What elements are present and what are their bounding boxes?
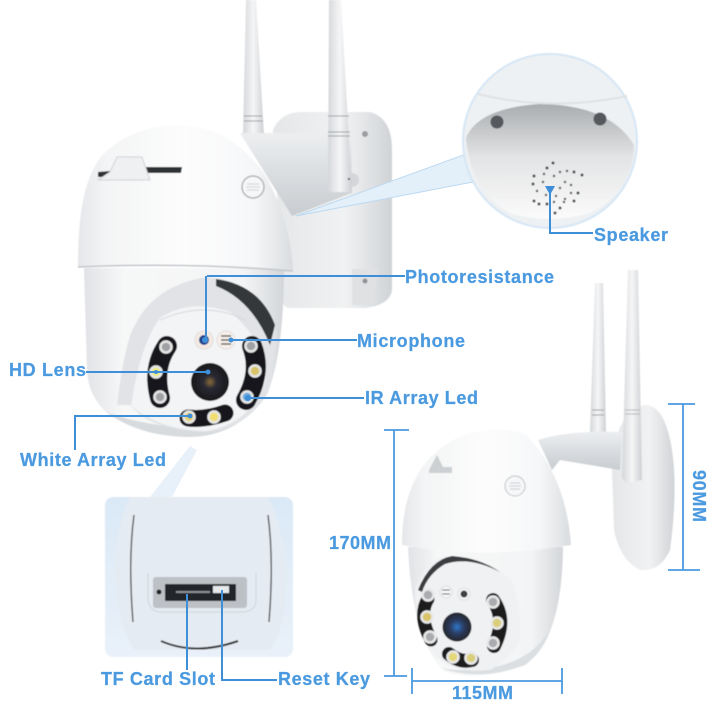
small camera lower body: [408, 547, 563, 676]
panel: speaker close-up: [463, 54, 637, 228]
icon: main lens: [191, 363, 229, 401]
camera dome: [78, 125, 293, 271]
label: 90MM: 90MM: [689, 470, 709, 522]
label: 170MM: 170MM: [329, 533, 391, 553]
label: IR Array Led: IR Array Led: [365, 388, 478, 408]
icon: photoresistor: [195, 331, 213, 349]
label: Reset Key: Reset Key: [278, 669, 370, 689]
label: White Array Led: White Array Led: [20, 450, 166, 470]
annotation leader lines: [75, 192, 593, 680]
label: Microphone: Microphone: [357, 331, 465, 351]
camera lower body: [84, 268, 284, 437]
icon: left antenna: [243, 0, 264, 135]
label: HD Lens: HD Lens: [9, 360, 86, 380]
icon: white LED strips: [157, 346, 256, 418]
icon: speaker holes: [532, 162, 584, 214]
icon: small wall bracket: [538, 405, 675, 570]
label: 115MM: 115MM: [452, 683, 513, 703]
label: TF Card Slot: TF Card Slot: [101, 669, 215, 689]
callout beam to speaker: [296, 154, 473, 216]
panel: TF card inset: [105, 497, 293, 657]
small camera dome: [402, 429, 571, 552]
label: Speaker: Speaker: [594, 225, 668, 245]
camera face opening: [117, 277, 276, 432]
icon: wall bracket: [240, 112, 392, 308]
main camera: [78, 0, 392, 437]
small camera face: [415, 556, 520, 671]
dimension lines: [384, 404, 700, 694]
icon: microphone: [217, 331, 235, 349]
icon: card slot plate: [153, 577, 247, 608]
icon: right antenna: [328, 0, 352, 192]
callout funnel to inset: [150, 446, 197, 497]
icon: front antenna: [622, 270, 642, 483]
label: Photoresistance: Photoresistance: [405, 267, 554, 287]
small camera: [402, 270, 675, 676]
icon: LEDs: [150, 340, 260, 422]
icon: speaker screws: [490, 112, 606, 128]
leader dots: [154, 186, 555, 418]
icon: rear antenna: [590, 283, 606, 432]
